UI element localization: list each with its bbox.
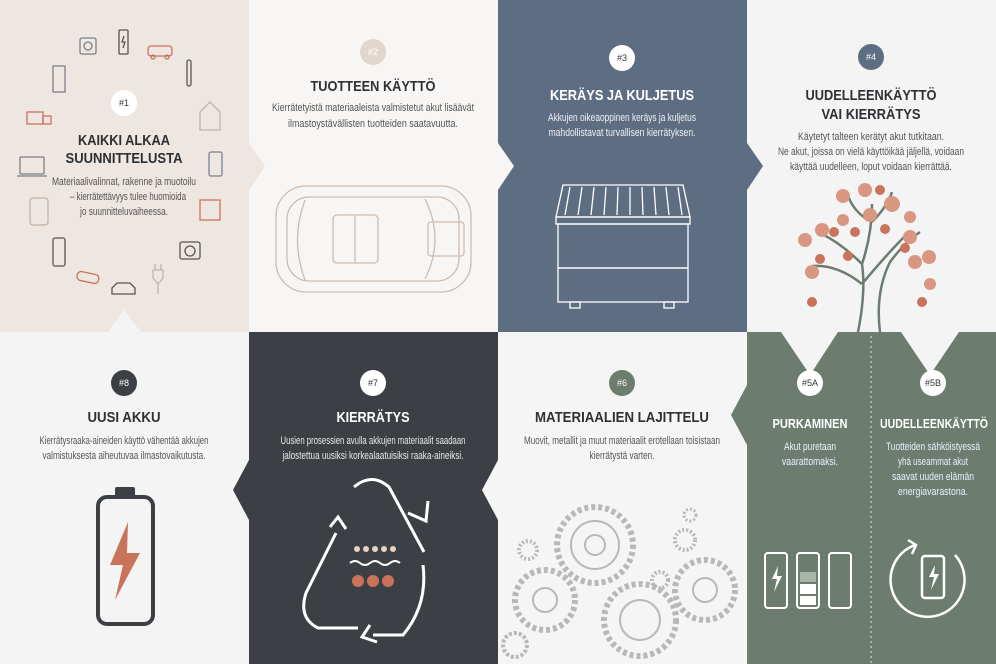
heading 5A: PURKAMINEN [772, 416, 848, 431]
text 1: Materiaalivalinnat, rakenne ja muotoilu [52, 176, 196, 188]
text 8 [40, 435, 208, 462]
arrow: 4 to 5B [901, 332, 959, 375]
text 7: jalostettua uusiksi korkealaatuisiksi raaka-aineiksi. [282, 450, 464, 462]
heading 1: KAIKKI ALKAA [78, 132, 170, 149]
badge #4 [858, 44, 884, 70]
text 5A: Akut puretaan [784, 441, 836, 453]
badge #3: #3 [617, 53, 627, 63]
heading 2: TUOTTEEN KÄYTTÖ [310, 78, 436, 95]
text 5B: energiavarastona. [898, 486, 968, 498]
badge #8: #8 [119, 378, 129, 388]
badge #6 [609, 370, 635, 396]
arrow: 5A to 6 [731, 385, 747, 445]
icon: reuse battery [891, 540, 965, 617]
panel 3 [548, 45, 696, 308]
badge #2 [360, 39, 386, 65]
badge #8 [111, 370, 137, 396]
heading 6: MATERIAALIEN LAJITTELU [535, 409, 709, 426]
text 5A [782, 441, 838, 468]
badge #5B: #5B [925, 378, 941, 388]
text 2: Kierrätetyistä materiaaleista valmistetut akut lisäävät [272, 102, 474, 114]
badge #2: #2 [368, 47, 378, 57]
text 3 [548, 112, 696, 139]
text 6 [524, 435, 720, 462]
icons: product ring [17, 30, 222, 294]
text 8: valmistuksesta aiheutuvaa ilmastovaikutusta. [42, 450, 206, 462]
heading 4 [806, 87, 937, 123]
text 4: käyttää uudelleen, loput voidaan kierrättää. [790, 161, 952, 173]
panel 7 [280, 370, 466, 642]
panel 8 [40, 370, 208, 624]
arrow: 6 to 7 [482, 460, 498, 520]
heading 4: UUDELLEENKÄYTTÖ [806, 87, 937, 104]
badge #7: #7 [368, 378, 378, 388]
text 4 [778, 131, 964, 173]
badge #5A: #5A [802, 378, 818, 388]
badge #3 [609, 45, 635, 71]
panel 2 [272, 39, 474, 292]
badge #7 [360, 370, 386, 396]
panel 4 [778, 44, 964, 332]
text 1 [52, 176, 196, 218]
text 4: Käytetyt talteen kerätyt akut tutkitaan. [798, 131, 944, 143]
icon: battery tree [798, 183, 936, 332]
text 8: Kierrätysraaka-aineiden käyttö vähentää akkujen [40, 435, 208, 447]
text 2: ilmastoystävällisten tuotteiden saatavuutta. [288, 118, 458, 130]
text 1: – kierrätettävyys tulee huomioida [70, 191, 187, 203]
badge #5A [797, 370, 823, 396]
badge #6: #6 [617, 378, 627, 388]
heading 1 [66, 132, 183, 167]
text 1: jo suunnitteluvaiheessa. [79, 206, 168, 218]
icon: recycle [304, 480, 428, 642]
icon: batteries [765, 553, 851, 608]
arrow: 7 to 8 [233, 460, 249, 520]
icon: gears [503, 507, 735, 657]
badge #1 [111, 90, 137, 116]
badge #5B [920, 370, 946, 396]
arrow: 3 to 4 [747, 143, 763, 190]
icon: car top view [276, 186, 471, 292]
heading 4: VAI KIERRÄTYS [822, 106, 920, 123]
arrow: 1 to 2 [249, 143, 265, 190]
text 7: Uusien prosessien avulla akkujen materiaalit saadaan [280, 435, 466, 447]
text 3: mahdollistavat turvallisen kierrätyksen. [548, 127, 696, 139]
heading 7: KIERRÄTYS [336, 409, 410, 426]
arrow: 4 to 5A [781, 332, 838, 375]
arrow: 2 to 3 [498, 143, 514, 190]
panel 1 [17, 30, 222, 294]
text 2 [272, 102, 474, 130]
text 6: kierrätystä varten. [590, 450, 654, 462]
text 6: Muovit, metallit ja muut materiaalit erotellaan toisistaan [524, 435, 720, 447]
badge #1: #1 [119, 98, 129, 108]
text 5B [886, 441, 981, 498]
text 5B: yhä useammat akut [898, 456, 968, 468]
text 5A: vaarattomaksi. [782, 456, 838, 468]
panel 5B [880, 370, 988, 617]
panel 5A [765, 370, 851, 608]
text 5B: saavat uuden elämän [892, 471, 974, 483]
panel 6 [503, 370, 735, 657]
icon: new battery [98, 487, 153, 624]
heading 1: SUUNNITTELUSTA [66, 150, 183, 167]
text 7 [280, 435, 466, 462]
icon: dumpster [556, 185, 690, 308]
heading 8: UUSI AKKU [88, 409, 160, 426]
text 3: Akkujen oikeaoppinen keräys ja kuljetus [548, 112, 696, 124]
heading 3: KERÄYS JA KULJETUS [550, 87, 694, 104]
arrow: 8 to 1 [108, 310, 141, 332]
badge #4: #4 [866, 52, 876, 62]
